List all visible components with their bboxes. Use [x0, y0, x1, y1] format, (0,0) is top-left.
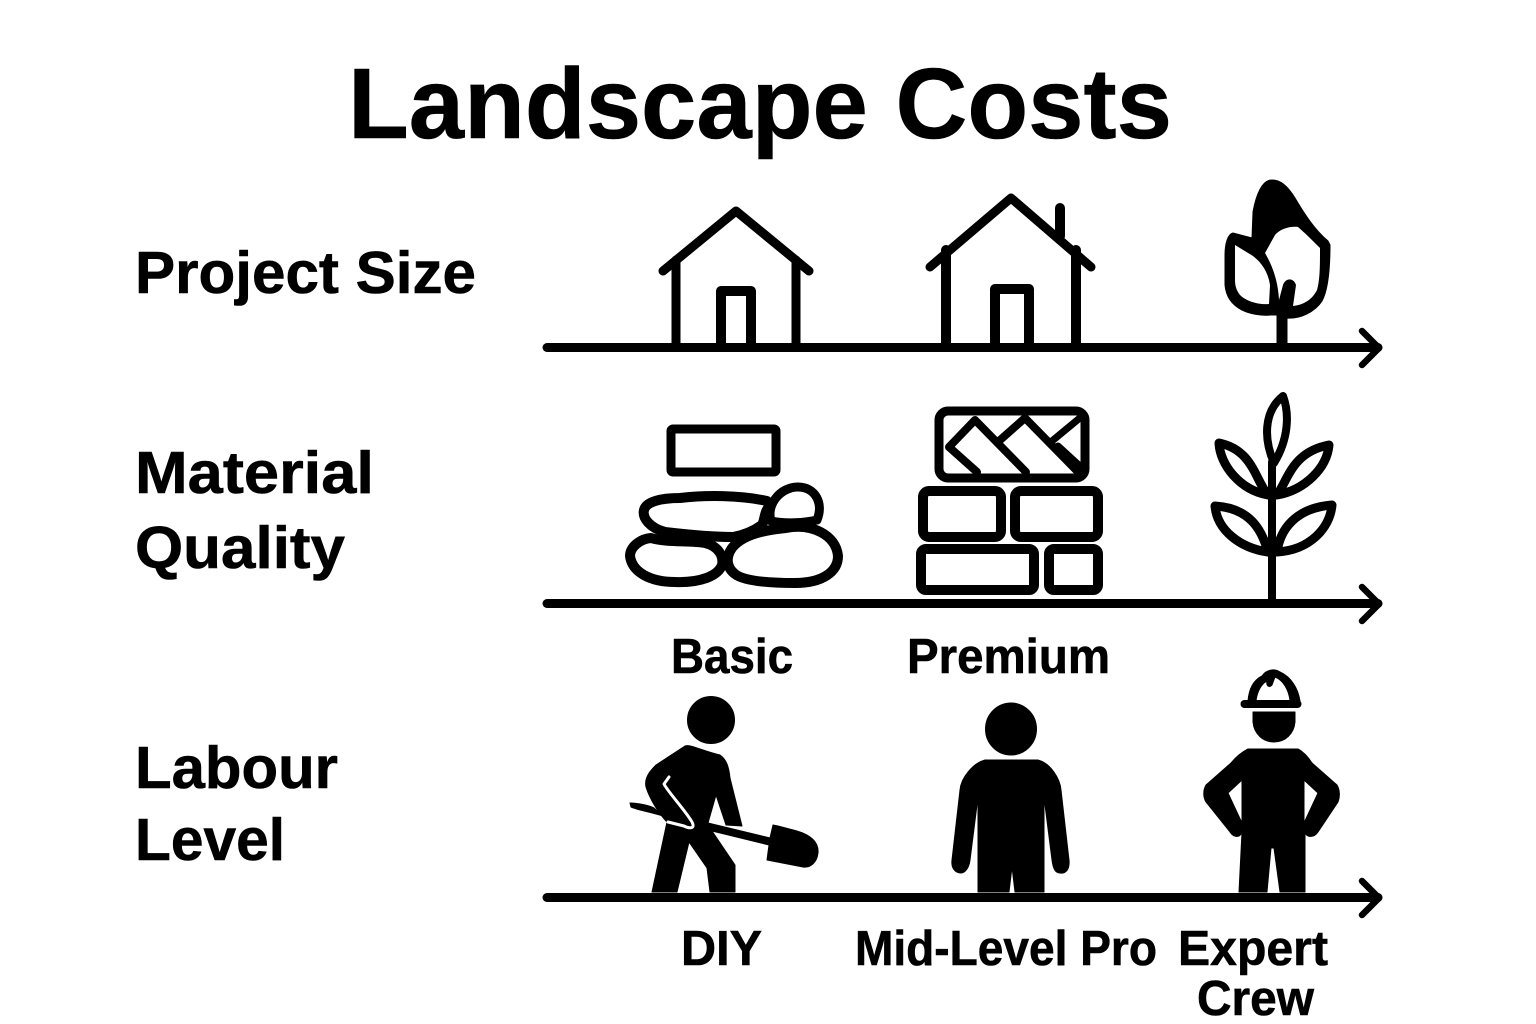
text: basic: Basic [671, 630, 793, 684]
row: labour level [135, 670, 1379, 1024]
row label: material quality: Material [135, 440, 374, 506]
icon: premium pavers and bricks [921, 411, 1098, 590]
arrow: material quality axis [547, 587, 1379, 621]
icon: DIY person with shovel [630, 696, 818, 892]
icon: mid-level person [952, 703, 1069, 892]
row: material quality [135, 396, 1379, 684]
icon: expert with hard hat [1204, 670, 1339, 892]
title: Landscape Costs [348, 48, 1172, 160]
icon: small house [663, 211, 809, 345]
row label: labour level: Labour [135, 735, 338, 801]
icon: basic stones [630, 429, 838, 583]
text: DIY: DIY [681, 922, 762, 976]
row label: material quality: Quality [135, 515, 345, 581]
icon: large house [930, 198, 1091, 345]
icon: plant [1215, 396, 1332, 600]
arrow: project size axis [547, 331, 1379, 365]
text: mid-level pro: Mid-Level Pro [855, 922, 1157, 976]
arrow: labour level axis [547, 881, 1379, 915]
row: project size [135, 180, 1379, 365]
text: expert crew: Expert [1178, 922, 1328, 976]
text: premium: Premium [907, 630, 1110, 684]
icon: tree [1225, 180, 1330, 345]
row label: project size: Project Size [135, 240, 476, 306]
row label: labour level: Level [135, 807, 285, 873]
